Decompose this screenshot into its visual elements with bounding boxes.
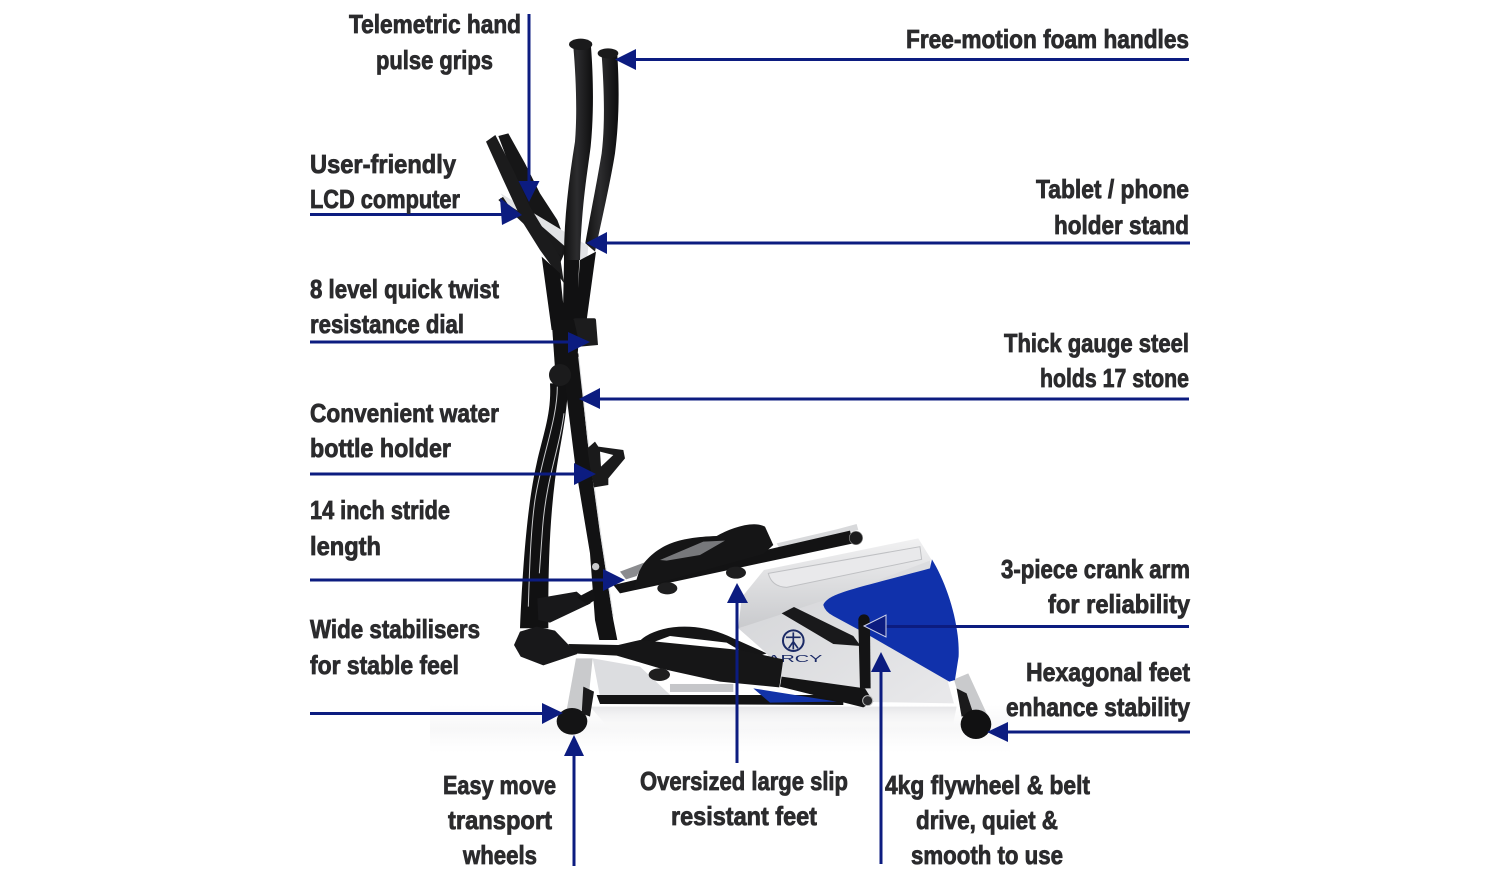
label: flywheel: smooth to use bbox=[911, 840, 1063, 870]
label: foam handles: Free-motion foam handles bbox=[906, 24, 1189, 54]
label: bottle holder: bottle holder bbox=[310, 433, 451, 463]
upper pedal tread bbox=[660, 541, 725, 561]
label: LCD computer: LCD computer bbox=[310, 184, 460, 214]
label: resistance dial bbox=[310, 274, 499, 339]
arrow: thick steel bbox=[579, 388, 1189, 409]
brand logo ring bbox=[783, 630, 804, 651]
rear base shell bbox=[593, 658, 671, 697]
left handle cap bbox=[569, 39, 592, 50]
console handlebar rear bbox=[498, 133, 567, 263]
console handlebar front bbox=[486, 135, 564, 283]
label: resistance dial: 8 level quick twist bbox=[310, 274, 499, 304]
small pedal rod bbox=[577, 589, 596, 605]
rear small pedal bbox=[537, 592, 591, 623]
arrow: foam handles bbox=[615, 49, 1189, 70]
label: transport wheels: Easy move bbox=[443, 770, 556, 800]
upper rod bbox=[613, 531, 853, 593]
crank arm bbox=[858, 622, 871, 688]
label: LCD computer: User-friendly bbox=[310, 149, 456, 179]
arrow: stabilisers bbox=[310, 703, 563, 724]
label: stride length: length bbox=[310, 531, 381, 561]
right foam handle bbox=[585, 55, 619, 252]
label: stride length: 14 inch stride bbox=[310, 495, 450, 525]
top shell bbox=[738, 538, 932, 628]
upper pedal toe bbox=[620, 563, 644, 579]
frame bolt bbox=[592, 563, 599, 570]
label: transport wheels: wheels bbox=[462, 840, 537, 870]
label: stabilisers bbox=[310, 614, 480, 680]
label: thick steel bbox=[1004, 328, 1189, 393]
label: hexagonal feet bbox=[1006, 657, 1190, 722]
arrow: flywheel bbox=[871, 652, 891, 864]
label: flywheel bbox=[885, 770, 1090, 870]
label: stabilisers: Wide stabilisers bbox=[310, 614, 480, 644]
label: tablet holder: holder stand bbox=[1054, 210, 1189, 240]
rear silver stand bbox=[567, 658, 593, 710]
brand name: ARCY bbox=[767, 654, 822, 665]
rear arm highlights bbox=[528, 387, 564, 607]
crank knob bbox=[858, 614, 870, 626]
pivot ball bbox=[549, 364, 571, 386]
arrow: resistance dial bbox=[310, 332, 590, 353]
upper handles and console bbox=[486, 39, 619, 330]
base, flywheel housing and pedals bbox=[514, 524, 991, 739]
label: slip resistant feet: resistant feet bbox=[671, 801, 817, 831]
label: transport wheels bbox=[443, 770, 556, 870]
pedal adjuster foot bbox=[649, 668, 670, 681]
upper roller bbox=[849, 531, 863, 545]
upper adjuster foot left bbox=[657, 582, 677, 594]
arrow: stride length bbox=[310, 569, 625, 591]
arrow: bottle holder bbox=[310, 463, 596, 485]
crank pivot bbox=[863, 696, 873, 706]
label: resistance dial: resistance dial bbox=[310, 309, 464, 339]
front post bbox=[954, 673, 987, 717]
label: thick steel: holds 17 stone bbox=[1040, 363, 1189, 393]
label: slip resistant feet: Oversized large slip bbox=[640, 766, 848, 796]
label: transport wheels: transport bbox=[448, 805, 552, 835]
right foot bracket bbox=[957, 688, 973, 717]
label: hexagonal feet: enhance stability bbox=[1006, 692, 1190, 722]
hexagonal foot bbox=[961, 710, 991, 739]
upper frame struts bbox=[542, 252, 596, 330]
label: flywheel: 4kg flywheel & belt bbox=[885, 770, 1090, 800]
arrow: transport wheels bbox=[564, 735, 584, 866]
base rail bbox=[597, 695, 843, 705]
lower housing bbox=[738, 560, 954, 703]
tablet holder bbox=[501, 193, 588, 259]
label: crank arm: for reliability bbox=[1048, 589, 1190, 619]
label: telemetric grips bbox=[349, 9, 521, 75]
label: flywheel: drive, quiet & bbox=[916, 805, 1058, 835]
rear pivot bracket bbox=[514, 627, 577, 665]
elliptical machine photo bbox=[486, 39, 991, 739]
lower pedal and arm bbox=[568, 640, 783, 687]
lower frame bbox=[520, 320, 625, 640]
left foam handle bbox=[564, 47, 593, 260]
base shadow bbox=[590, 707, 957, 733]
label: stride length bbox=[310, 495, 450, 561]
tablet bracket bbox=[498, 197, 563, 257]
upper silver strip bbox=[777, 524, 858, 549]
arrow: LCD computer bbox=[310, 198, 522, 225]
label: slip resistant feet bbox=[640, 766, 848, 831]
label: bottle holder: Convenient water bbox=[310, 398, 499, 428]
top shell panel line bbox=[768, 547, 922, 587]
lower pedal hoop bbox=[640, 627, 767, 658]
right handle cap bbox=[598, 48, 618, 58]
label: thick steel: Thick gauge steel bbox=[1004, 328, 1189, 358]
upper pedal bbox=[633, 524, 773, 590]
rear arm bbox=[520, 383, 568, 628]
label: crank arm: 3-piece crank arm bbox=[1001, 554, 1190, 584]
left transport wheel bbox=[557, 708, 587, 735]
resistance dial bbox=[574, 320, 598, 347]
resistance dial top bbox=[573, 318, 596, 330]
label: stabilisers: for stable feel bbox=[310, 650, 459, 680]
label: bottle holder bbox=[310, 398, 499, 463]
floor shadow bbox=[430, 705, 1010, 753]
silver rail bbox=[670, 684, 733, 692]
wheel bracket bbox=[582, 687, 594, 717]
upper frame section bbox=[552, 320, 580, 368]
main mast bbox=[565, 353, 617, 640]
mast highlight bbox=[579, 357, 613, 617]
label: crank arm bbox=[1001, 554, 1190, 619]
arrow: tablet holder bbox=[586, 232, 1190, 254]
arrow: crank arm bbox=[864, 615, 1189, 637]
arrow: slip resistant feet bbox=[727, 583, 748, 763]
label: hexagonal feet: Hexagonal feet bbox=[1026, 657, 1190, 687]
label: tablet holder: Tablet / phone bbox=[1036, 174, 1189, 204]
label: LCD computer bbox=[310, 149, 460, 214]
arrow: telemetric grips bbox=[518, 14, 540, 202]
label: telemetric grips: Telemetric hand bbox=[349, 9, 521, 39]
blue lower panel bbox=[753, 688, 837, 703]
bottle holder bbox=[587, 442, 625, 487]
blue flywheel cover bbox=[823, 559, 959, 682]
label: telemetric grips: pulse grips bbox=[376, 45, 493, 75]
label: tablet holder bbox=[1036, 174, 1189, 240]
arrow: hexagonal feet bbox=[987, 722, 1190, 742]
upper adjuster foot right bbox=[726, 567, 746, 579]
brand logo figure bbox=[786, 632, 801, 649]
vent grille bbox=[782, 607, 861, 646]
lower crank link bbox=[780, 677, 873, 707]
